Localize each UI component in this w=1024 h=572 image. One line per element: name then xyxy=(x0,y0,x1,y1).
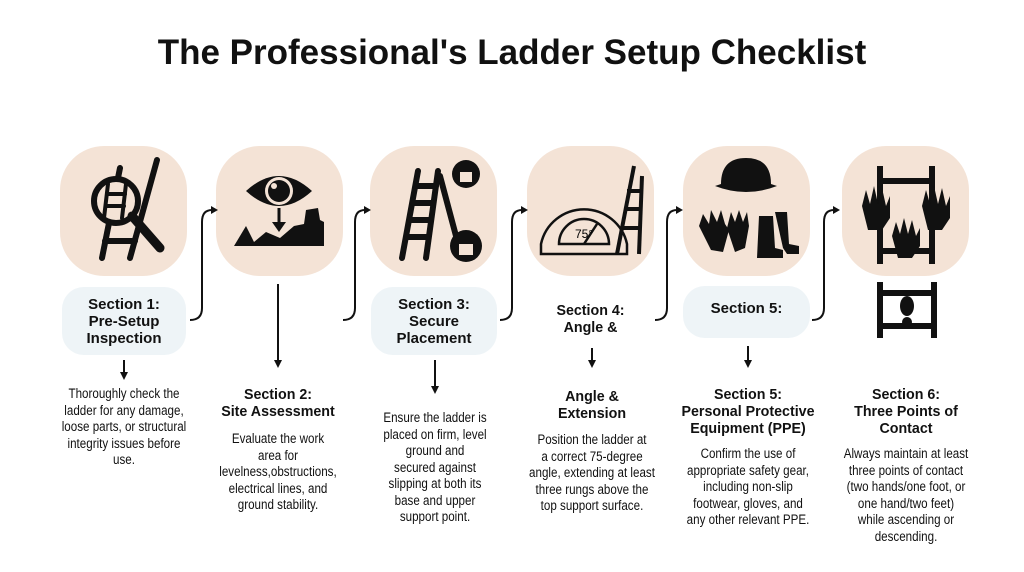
panel: tile 6 contact xyxy=(842,146,969,276)
label box: section 1: Section 1: xyxy=(88,296,160,313)
text: section 5: footwear, gloves, and xyxy=(693,496,803,510)
heading: section 5 xyxy=(681,386,815,437)
text: section 1: integrity issues before xyxy=(68,436,180,450)
text: section 4: Position the ladder at xyxy=(537,432,647,447)
text: section 1 xyxy=(62,386,186,467)
title: The Professional's Ladder Setup Checklist xyxy=(158,33,866,72)
panel: tile 3 secure xyxy=(370,146,497,276)
heading: section 4: Section 4: xyxy=(556,302,625,319)
text: section 6: three points of contact xyxy=(849,462,963,478)
heading: section 6: Section 6: xyxy=(872,386,940,403)
heading: section 4 extension: Angle & xyxy=(565,388,619,405)
heading: section 6: Contact xyxy=(879,420,933,437)
label box: section 3: Placement xyxy=(396,330,472,347)
panel: tile 4 angle xyxy=(527,146,654,276)
text: section 3: Ensure the ladder is xyxy=(383,410,487,425)
text: section 5 xyxy=(687,446,809,527)
text: section 6: one hand/two feet) xyxy=(858,496,954,510)
text: section 2: electrical lines, and xyxy=(229,480,327,496)
heading: section 4 xyxy=(556,302,625,336)
heading: section 2: Site Assessment xyxy=(221,403,335,420)
panel: tile 2 site xyxy=(216,146,343,276)
text: section 2: ground stability. xyxy=(238,497,318,512)
panel: tile 4 angle: 75° xyxy=(575,227,593,241)
text: section 4 xyxy=(529,432,655,513)
panel: tile 5 PPE xyxy=(683,146,810,276)
text: section 5: including non-slip xyxy=(703,479,793,494)
text: section 1: ladder for any damage, xyxy=(64,402,184,418)
text: section 3: support point. xyxy=(400,509,470,524)
heading: section 2: Section 2: xyxy=(244,386,312,403)
text: section 1: Thoroughly check the xyxy=(68,386,179,401)
heading: section 5: Equipment (PPE) xyxy=(690,420,806,437)
heading: section 5: Personal Protective xyxy=(681,403,815,420)
panel: tile 1 inspection xyxy=(60,146,187,276)
label box: section 1 xyxy=(62,287,186,355)
text: section 3 xyxy=(383,410,487,524)
text: section 5: Confirm the use of xyxy=(701,446,795,461)
heading: section 6: Three Points of xyxy=(854,403,958,420)
text: section 4: top support surface. xyxy=(541,498,643,513)
text: section 4: three rungs above the xyxy=(536,482,648,496)
text: section 5: appropriate safety gear, xyxy=(687,462,809,478)
text: section 4: a correct 75-degree xyxy=(541,448,643,464)
text: section 1: loose parts, or structural xyxy=(62,419,186,434)
label box: section 5 xyxy=(683,286,810,338)
text: section 2: area for xyxy=(258,448,298,462)
text: section 6 xyxy=(844,446,968,544)
text: section 2: levelness,obstructions, xyxy=(219,464,337,479)
heading: section 4: Angle & xyxy=(564,319,617,336)
label box: section 5: Section 5: xyxy=(711,300,782,317)
text: section 6: descending. xyxy=(875,528,937,544)
text: section 3: placed on firm, level xyxy=(383,426,487,442)
text: section 3: secured against xyxy=(394,460,476,474)
heading: section 2 xyxy=(221,386,335,420)
text: section 6: Always maintain at least xyxy=(844,446,968,461)
text: section 3: ground and xyxy=(406,443,464,458)
text: section 1: use. xyxy=(113,452,135,467)
heading: section 4 extension: Extension xyxy=(558,405,626,422)
text: section 2: Evaluate the work xyxy=(232,431,324,446)
text: section 3: slipping at both its xyxy=(389,476,481,491)
text: section 3: base and upper xyxy=(395,492,475,508)
heading: section 4 extension xyxy=(558,388,626,422)
text: section 4: angle, extending at least xyxy=(529,465,655,480)
text: section 6: (two hands/one foot, or xyxy=(847,479,965,494)
heading: section 5: Section 5: xyxy=(714,386,782,403)
label box: section 1: Pre-Setup xyxy=(89,313,159,330)
text: section 2 xyxy=(219,431,337,512)
text: section 5: any other relevant PPE. xyxy=(687,512,809,527)
label box: section 1: Inspection xyxy=(86,330,162,347)
label box: section 3: Section 3: xyxy=(398,296,470,313)
text: section 6: while ascending or xyxy=(858,512,954,527)
label box: section 3 xyxy=(371,287,497,355)
heading: section 6 xyxy=(854,386,958,437)
label box: section 3: Secure xyxy=(409,313,459,330)
